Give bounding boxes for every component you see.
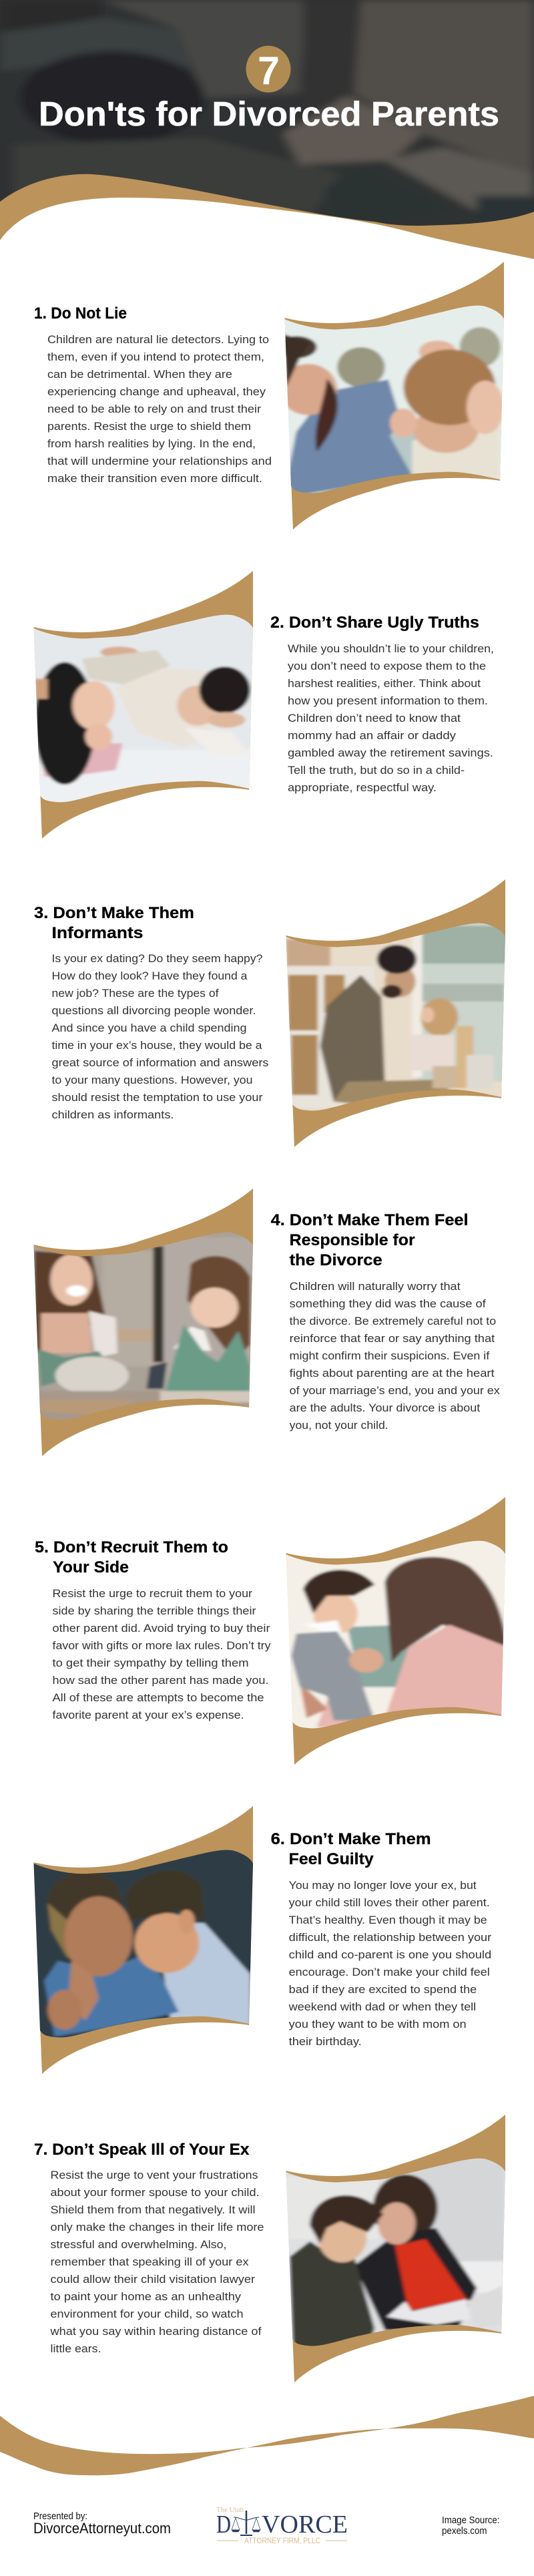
body text: can be detrimental. When they are — [47, 369, 232, 381]
body text: what you say within hearing distance of — [49, 2326, 262, 2338]
photo: mother embracing son — [33, 1850, 253, 2038]
photo: mother and daughter baking — [33, 1233, 253, 1420]
body text: experiencing change and upheaval, they — [47, 386, 266, 398]
body text: new job? These are the types of — [52, 988, 219, 1000]
body text: should resist the temptation to use your — [52, 1092, 263, 1104]
body text: how sad the other parent has made you. — [52, 1675, 268, 1687]
body text: their birthday. — [289, 2036, 362, 2048]
gold image frame — [33, 1189, 253, 1456]
footer — [33, 2506, 499, 2545]
heading: 2. Don’t Share Ugly Truths — [270, 614, 479, 632]
gold image frame — [284, 262, 504, 529]
gold image frame — [33, 571, 253, 839]
bottom gold wave — [0, 2396, 534, 2475]
body text: favor with gifts or more lax rules. Don’t try — [52, 1640, 271, 1652]
gold image frame — [286, 1497, 505, 1765]
heading: Responsible for — [290, 1231, 415, 1249]
heading: Informants — [52, 924, 143, 942]
body text: While you shouldn’t lie to your children, — [288, 643, 494, 655]
section 5 — [35, 1497, 511, 1765]
body text: Children don’t need to know that — [288, 712, 461, 724]
number badge: 7 — [258, 49, 280, 93]
body text: of your marriage’s end, you and your ex — [290, 1385, 501, 1397]
body text: Shield them from that negatively. It will — [51, 2204, 255, 2216]
presented by — [33, 2511, 171, 2537]
body text: make their transition even more difficult. — [47, 473, 262, 485]
title: Don'ts for Divorced Parents — [39, 95, 499, 133]
body text: encourage. Don’t make your child feel — [289, 1966, 490, 1978]
heading: 3. Don’t Make Them — [34, 904, 194, 922]
header gold wave — [0, 174, 534, 262]
heading — [34, 904, 194, 942]
body text: children as informants. — [52, 1109, 174, 1121]
body text: weekend with dad or when they tell — [288, 2001, 476, 2013]
section 7 — [34, 2115, 511, 2382]
section 2 — [27, 571, 494, 839]
section 3 — [34, 879, 511, 1147]
body text: time in your ex’s house, they would be a — [52, 1040, 262, 1052]
body text: other parent did. Avoid trying to buy their — [52, 1623, 270, 1635]
body text: to get their sympathy by telling them — [52, 1657, 248, 1669]
body text: favorite parent at your ex’s expense. — [52, 1709, 244, 1721]
body text: All of these are attempts to become the — [52, 1692, 264, 1704]
body text: Children are natural lie detectors. Lying to — [47, 334, 269, 346]
body text — [52, 953, 268, 1121]
body text: fights about parenting are at the heart — [290, 1367, 495, 1379]
heading — [35, 1538, 228, 1576]
number badge — [246, 45, 291, 93]
body text: to your many questions. However, you — [52, 1074, 253, 1086]
section 4 — [27, 1189, 501, 1456]
body text: gambled away the retirement savings. — [288, 747, 493, 759]
body text — [290, 1281, 501, 1432]
heading: Your Side — [53, 1558, 129, 1576]
body text: you they want to be with mom on — [289, 2018, 467, 2030]
body text: little ears. — [51, 2343, 101, 2355]
heading: 4. Don’t Make Them Feel — [271, 1211, 469, 1229]
section 1 — [34, 262, 511, 529]
body text: mommy had an affair or daddy — [288, 730, 457, 742]
body text: Resist the urge to vent your frustrations — [51, 2169, 258, 2181]
photo: mother and daughter on bed — [33, 614, 253, 803]
body text: You may no longer love your ex, but — [289, 1880, 477, 1892]
section 6 — [27, 1806, 492, 2074]
heading: Feel Guilty — [289, 1850, 374, 1868]
body text: reinforce that fear or say anything that — [290, 1333, 495, 1345]
heading: 7. Don’t Speak Ill of Your Ex — [34, 2141, 250, 2159]
body text: harshest realities, either. Think about — [288, 678, 481, 690]
body text: them, even if you intend to protect them, — [47, 351, 264, 363]
body text: your child still loves their other parent. — [289, 1897, 490, 1909]
body text: Children will naturally worry that — [290, 1281, 461, 1293]
header — [0, 0, 534, 280]
photo: mother and son — [286, 1541, 505, 1728]
presented by: Presented by: — [33, 2511, 87, 2522]
heading: 5. Don’t Recruit Them to — [35, 1538, 228, 1556]
photo: father and daughter — [286, 923, 505, 1111]
body text: Tell the truth, but do so in a child- — [288, 765, 465, 777]
body text: bad if they are excited to spend the — [289, 1984, 477, 1996]
body text: only make the changes in their life more — [51, 2221, 264, 2233]
body text: that will undermine your relationships and — [47, 455, 272, 467]
logo: VORCE — [262, 2511, 348, 2539]
body text: parents. Resist the urge to shield them — [47, 421, 251, 433]
photo: mother comforting child — [284, 306, 504, 493]
body text: could allow their child visitation lawyer — [51, 2274, 256, 2286]
logo: The Utah — [216, 2506, 244, 2514]
body text: That’s healthy. Even though it may be — [289, 1914, 487, 1926]
heading — [271, 1830, 431, 1868]
body text: something they did was the cause of — [290, 1298, 486, 1310]
gold image frame — [286, 879, 505, 1147]
image source — [442, 2515, 499, 2537]
body text — [49, 2169, 264, 2355]
body text: How do they look? Have they found a — [52, 970, 248, 982]
body text: need to be able to rely on and trust their — [47, 403, 262, 415]
body text — [52, 1588, 271, 1721]
body text: environment for your child, so watch — [51, 2308, 243, 2320]
icon: scales of justice — [232, 2511, 260, 2535]
body text: you don’t need to expose them to the — [288, 660, 486, 672]
heading — [271, 1211, 469, 1269]
heading: 1. Do Not Lie — [34, 304, 127, 323]
image source: Image Source: — [442, 2515, 499, 2526]
body text: appropriate, respectful way. — [288, 782, 437, 794]
logo — [216, 2506, 348, 2545]
body text: side by sharing the terrible things their — [52, 1605, 256, 1617]
body text — [288, 643, 494, 794]
body text: are the adults. Your divorce is about — [290, 1402, 481, 1414]
heading: 6. Don’t Make Them — [271, 1830, 431, 1848]
image source: pexels.com — [442, 2525, 487, 2537]
body text: Resist the urge to recruit them to your — [52, 1588, 253, 1600]
body text: might confirm their suspicions. Even if — [290, 1350, 490, 1362]
body text: to paint your home as an unhealthy — [51, 2291, 242, 2303]
body text — [288, 1880, 492, 2048]
gold image frame — [286, 2115, 505, 2382]
body text: about your former spouse to your child. — [51, 2187, 259, 2199]
body text: And since you have a child spending — [52, 1022, 247, 1034]
header photo background — [0, 0, 534, 267]
body text: great source of information and answers — [52, 1057, 268, 1069]
gold image frame — [33, 1806, 253, 2074]
body text: remember that speaking ill of your ex — [51, 2256, 249, 2268]
body text: stressful and overwhelming. Also, — [51, 2239, 227, 2251]
photo: mother reading with son — [286, 2158, 505, 2346]
body text: the divorce. Be extremely careful not to — [290, 1315, 496, 1327]
body text: you, not your child. — [290, 1420, 388, 1432]
body text: from harsh realities by lying. In the end, — [47, 438, 256, 450]
logo: D — [216, 2511, 231, 2539]
body text: child and co-parent is one you should — [289, 1949, 491, 1961]
body text: questions all divorcing people wonder. — [52, 1005, 256, 1017]
body text: Is your ex dating? Do they seem happy? — [52, 953, 263, 965]
body text: how you present information to them. — [288, 695, 488, 707]
body text — [47, 334, 272, 485]
logo: ATTORNEY FIRM, PLLC — [244, 2537, 320, 2545]
body text: difficult, the relationship between your — [289, 1932, 492, 1944]
heading: the Divorce — [290, 1251, 382, 1269]
presented by: DivorceAttorneyut.com — [33, 2520, 171, 2537]
